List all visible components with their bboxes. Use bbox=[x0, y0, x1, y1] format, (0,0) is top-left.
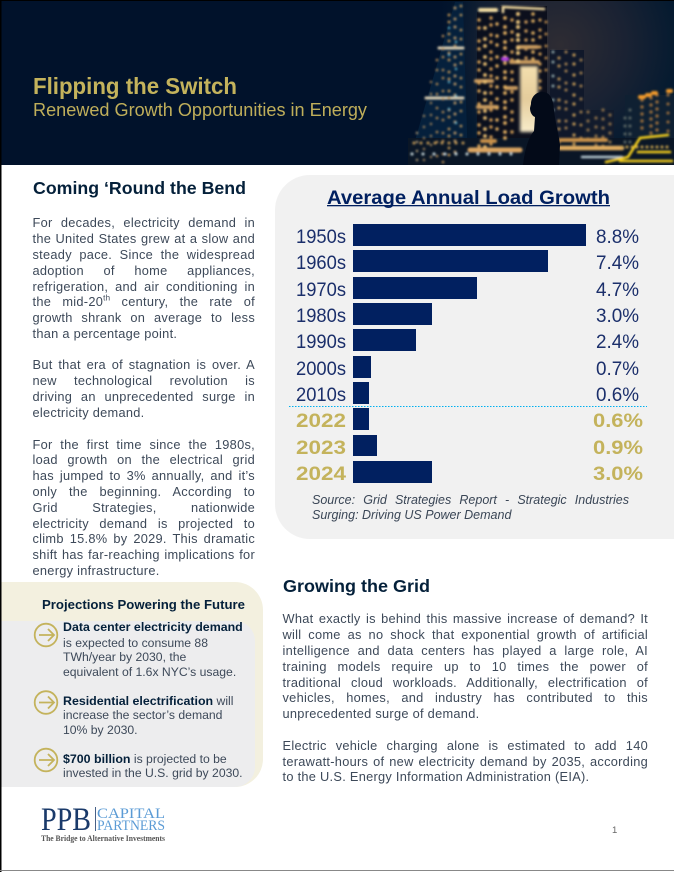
text block: intro paragraph 1: than a percentage point. bbox=[32, 326, 177, 341]
text block: intro paragraph 2: new technological revolution is bbox=[32, 373, 255, 388]
icon: arrow circle 3 bbox=[35, 749, 57, 771]
text block: growing the grid paragraph 2 bbox=[282, 738, 648, 784]
bar chart bbox=[289, 224, 647, 485]
callout item: 700 billion bbox=[63, 752, 243, 780]
text block: intro paragraph 3 bbox=[32, 437, 255, 578]
text block: growing the grid paragraph 1: traditional cloud workloads. Additionally, electrification of bbox=[282, 675, 648, 690]
bar chart: 4.7% bbox=[596, 280, 639, 301]
bar chart: 2022 bbox=[296, 411, 346, 432]
icon: arrow circle 1 bbox=[35, 624, 57, 646]
text block: intro paragraph 2: driving an unprecedented surge in bbox=[32, 389, 255, 404]
heading: Coming Round the Bend: Coming ‘Round the Bend bbox=[33, 178, 246, 198]
bar chart: 3.0% bbox=[593, 464, 643, 485]
text block: intro paragraph 3: Grid Strategies, nationwide bbox=[32, 500, 255, 515]
text block: intro paragraph 3: load growth on the electrical grid bbox=[32, 452, 255, 467]
page title: Flipping the Switch bbox=[33, 73, 237, 99]
page number: 1 bbox=[612, 825, 617, 836]
text block: growing the grid paragraph 1: intelligence and data centers has played a large role, AI bbox=[282, 643, 648, 658]
bar chart: 0.9% bbox=[593, 438, 643, 459]
text block: intro paragraph 2: electricity demand. bbox=[32, 405, 145, 420]
text block: intro paragraph 1 bbox=[32, 215, 255, 341]
logo: CAPITAL bbox=[97, 806, 165, 822]
chart title: Average Annual Load Growth bbox=[327, 187, 610, 209]
icon: arrow circle 2 bbox=[35, 691, 57, 714]
text block: intro paragraph 1: adoption of home appliances, bbox=[32, 263, 255, 278]
text block: intro paragraph 3: energy infrastructure. bbox=[32, 563, 160, 578]
text block: intro paragraph 3: has jumped to 3% annually, and it’s bbox=[32, 468, 255, 483]
text block: intro paragraph 1: growth shrank on average to less bbox=[32, 310, 255, 325]
header banner bbox=[0, 0, 674, 165]
text block: intro paragraph 3: electricity demand is projected to bbox=[32, 516, 255, 531]
text block: intro paragraph 1: For decades, electricity demand in bbox=[32, 215, 255, 230]
text block: intro paragraph 2: But that era of stagnation is over. A bbox=[32, 357, 255, 372]
callout item: residential electrification: increase the sector’s demand bbox=[63, 708, 222, 722]
text block: growing the grid paragraph 2: Electric vehicle charging alone is estimated to add 140 bbox=[282, 738, 648, 753]
bar chart: 0.6% bbox=[593, 411, 643, 432]
callout panel background bbox=[1, 582, 263, 787]
bar chart: 0.7% bbox=[596, 359, 639, 380]
text block: growing the grid paragraph 1: will come as no shock that exponential growth of artificial bbox=[282, 627, 648, 642]
bar chart: 1950s bbox=[296, 227, 346, 248]
callout item: 700 billion: $700 billion is projected to be bbox=[63, 752, 227, 766]
text block: growing the grid paragraph 1 bbox=[282, 611, 648, 721]
text block: intro paragraph 3: climb 15.8% by 2029. This dramatic bbox=[32, 531, 255, 546]
page subtitle: Renewed Growth Opportunities in Energy bbox=[33, 100, 367, 120]
callout item: data center demand: is expected to consume 88 bbox=[63, 636, 208, 650]
bar chart: 0.6% bbox=[596, 385, 639, 406]
bar chart: 2024 bbox=[296, 464, 346, 485]
callout item: data center demand bbox=[63, 620, 243, 679]
logo bbox=[41, 802, 166, 843]
callout item: data center demand: Data center electricity demand bbox=[63, 620, 243, 634]
callout item: data center demand: TWh/year by 2030, the bbox=[63, 650, 186, 664]
source note bbox=[312, 493, 629, 522]
text block: growing the grid paragraph 2: to the U.S. Energy Information Administration (EIA). bbox=[282, 769, 589, 784]
text block: growing the grid paragraph 2: terawatt-hours of new electricity demand by 2035, according bbox=[282, 754, 648, 769]
source note: Source: Grid Strategies Report - Strategic Industries bbox=[312, 493, 629, 507]
text block: intro paragraph 1: the United States grew at a slow and bbox=[32, 231, 255, 246]
callout item: data center demand: equivalent of 1.6x NYC’s usage. bbox=[63, 665, 236, 679]
text block: growing the grid paragraph 1: training models require up to 10 times the power of bbox=[282, 659, 648, 674]
bar chart: 8.8% bbox=[596, 227, 639, 248]
photo: night city skyline with silhouette bbox=[408, 1, 674, 165]
bar chart: 3.0% bbox=[596, 306, 639, 327]
text block: growing the grid paragraph 1: What exactly is behind this massive increase of demand? It bbox=[282, 611, 648, 626]
logo: PPB bbox=[41, 802, 91, 838]
callout item: residential electrification bbox=[63, 694, 233, 737]
bar chart: 1970s bbox=[296, 280, 346, 301]
source note: Surging: Driving US Power Demand bbox=[312, 508, 511, 522]
text block: intro paragraph 3: shift has far-reaching implications for bbox=[32, 547, 255, 562]
text block: growing the grid paragraph 1: unprecedented surge of demand. bbox=[282, 706, 479, 721]
text block: intro paragraph 2 bbox=[32, 357, 255, 420]
bar chart: 2.4% bbox=[596, 332, 639, 353]
callout item: 700 billion: invested in the U.S. grid by 2030. bbox=[63, 766, 243, 780]
text block: intro paragraph 1: refrigeration, and air conditioning in bbox=[32, 279, 255, 294]
bar chart: 2000s bbox=[296, 359, 346, 380]
text block: intro paragraph 3: only the beginning. According to bbox=[32, 484, 255, 499]
text block: intro paragraph 3: For the first time since the 1980s, bbox=[32, 437, 255, 452]
text block: intro paragraph 1: steady pace. Since the widespread bbox=[32, 247, 255, 262]
text block: growing the grid paragraph 1: vehicles, homes, and industry has contributed to this bbox=[282, 690, 648, 705]
callout item: residential electrification: 10% by 2030. bbox=[63, 723, 138, 737]
silhouette bbox=[523, 92, 560, 165]
logo: The Bridge to Alternative Investments bbox=[41, 833, 166, 843]
panel: average annual load growth chart bbox=[275, 175, 674, 539]
logo: PARTNERS bbox=[97, 818, 165, 834]
bar chart: 2023 bbox=[296, 438, 346, 459]
callout item: residential electrification: Residential electrification will bbox=[63, 694, 233, 708]
heading: Growing the Grid: Growing the Grid bbox=[283, 576, 430, 596]
bar chart: 7.4% bbox=[596, 253, 639, 274]
bar chart: 2010s bbox=[296, 385, 346, 406]
bar chart: 1990s bbox=[296, 332, 346, 353]
callout heading: Projections Powering the Future bbox=[42, 597, 245, 612]
bar chart: 1980s bbox=[296, 306, 346, 327]
text block: intro paragraph 1: the mid-20th century, the rate of bbox=[32, 294, 255, 309]
bar chart: 1960s bbox=[296, 253, 346, 274]
